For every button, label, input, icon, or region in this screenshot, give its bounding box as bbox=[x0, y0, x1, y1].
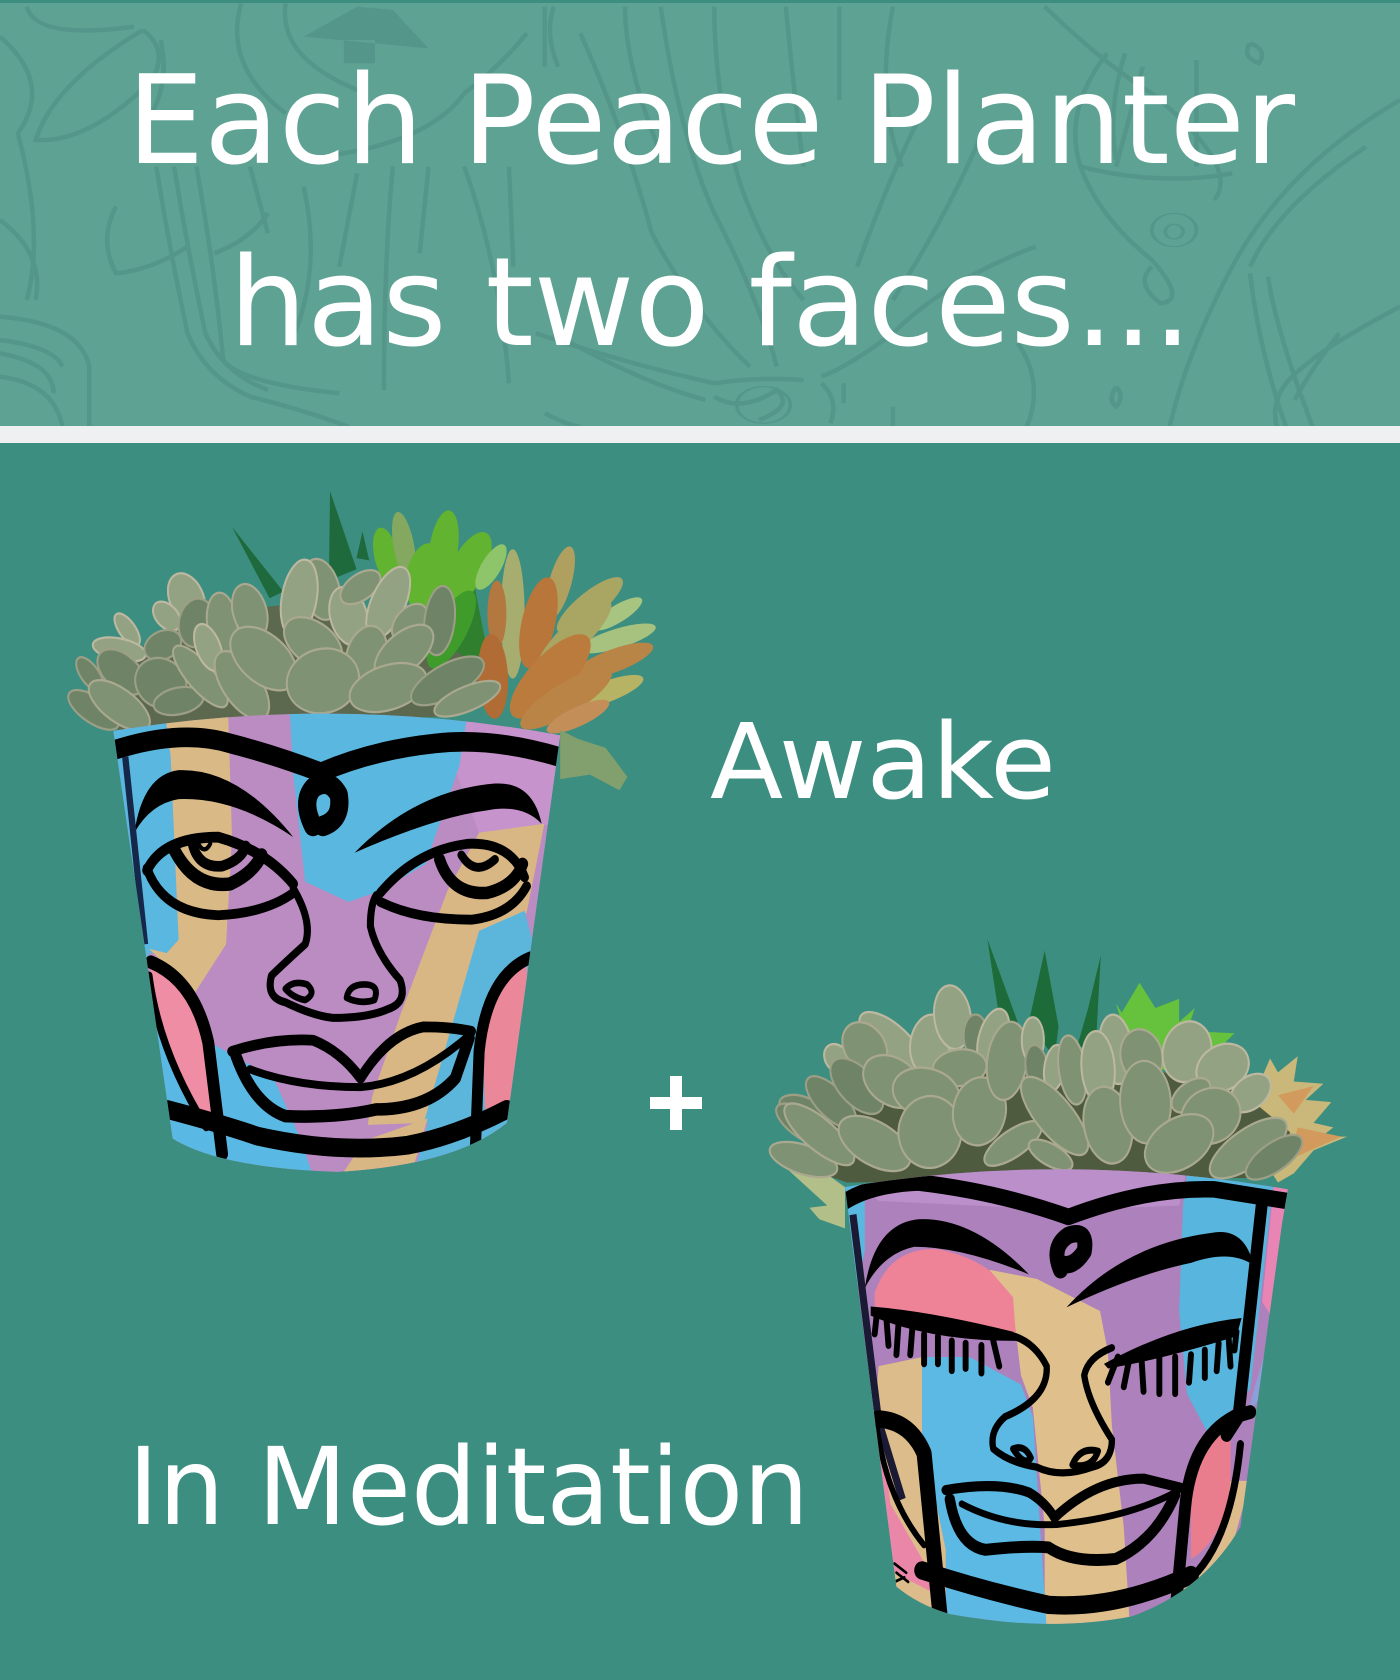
title: Each Peace Planter bbox=[127, 50, 1295, 193]
pot: awake face bbox=[114, 714, 560, 1172]
title bbox=[127, 50, 1295, 375]
face lines: awake bbox=[107, 737, 566, 1154]
icon: plus sign bbox=[650, 1076, 702, 1130]
succulent: meditation bbox=[767, 939, 1347, 1228]
label: In Meditation: In Meditation bbox=[128, 1426, 809, 1550]
divider band bbox=[0, 426, 1400, 443]
pot: meditation face bbox=[845, 1169, 1288, 1624]
meditation planter bbox=[767, 939, 1347, 1651]
awake planter bbox=[63, 491, 658, 1181]
banner panel bbox=[0, 0, 1400, 427]
title: has two faces... bbox=[229, 232, 1192, 375]
face lines: meditation bbox=[839, 1183, 1286, 1614]
label: Awake: Awake bbox=[710, 701, 1056, 823]
succulent: awake bbox=[63, 491, 658, 790]
